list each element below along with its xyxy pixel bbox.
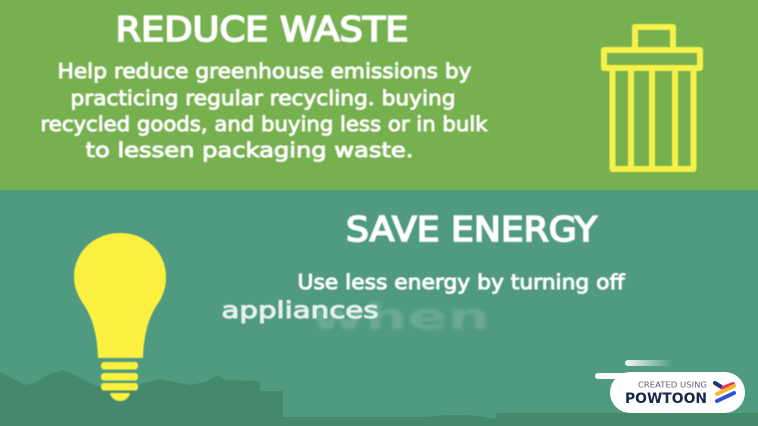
heading: save energy: SAVE ENERGY <box>346 210 597 250</box>
text block: reduce waste description: practicing regular recycling. buying <box>70 86 456 110</box>
logo: created using powtoon <box>595 360 745 413</box>
text block: reduce waste description: to lessen packaging waste. <box>86 138 414 162</box>
text block: reduce waste description: recycled goods, and buying less or in bulk <box>40 112 488 136</box>
icon: trash can <box>604 27 700 169</box>
heading: reduce waste: REDUCE WASTE <box>116 10 408 50</box>
text block: save energy description: Use less energy by turning off <box>298 270 626 294</box>
icon: powtoon mark <box>715 383 734 401</box>
panel: save energy background <box>0 190 758 426</box>
mountain and city silhouette <box>0 370 758 426</box>
logo: created using powtoon: CREATED USING <box>638 380 707 390</box>
logo: created using powtoon: POWTOON <box>625 391 707 407</box>
text block: reduce waste description <box>40 59 488 162</box>
animated word: when: when <box>310 297 490 338</box>
text block: reduce waste description: Help reduce greenhouse emissions by <box>58 59 472 83</box>
panel: reduce waste background <box>0 0 758 190</box>
icon: light bulb <box>74 233 166 401</box>
animated word: appliances: appliances <box>222 298 378 324</box>
